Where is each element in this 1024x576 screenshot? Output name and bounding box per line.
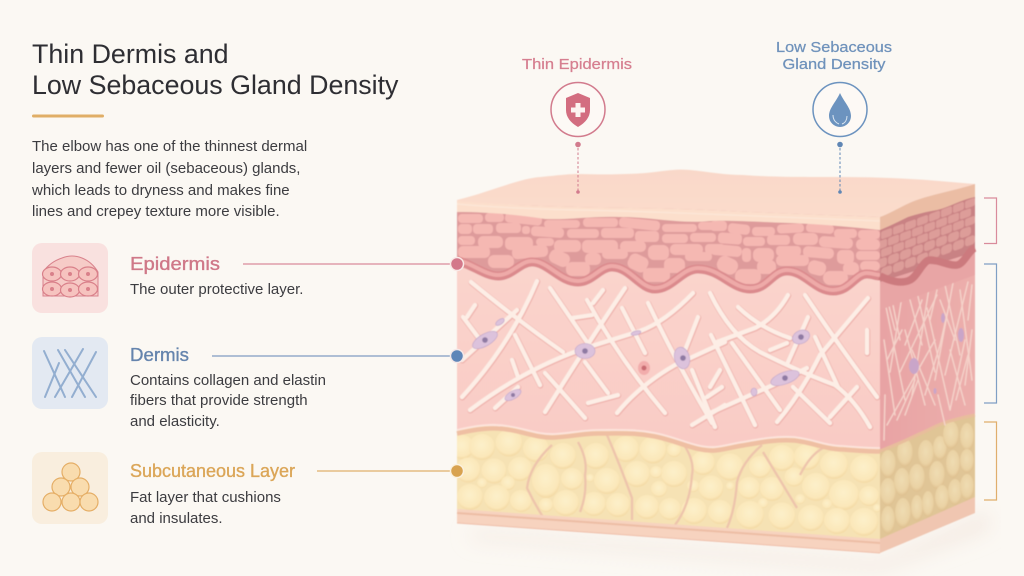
- right side: dermis boundary: [880, 415, 975, 451]
- right side: fat: [880, 400, 975, 541]
- cream stratum band: [457, 201, 880, 230]
- title: Low Sebaceous Gland Density: [32, 70, 399, 100]
- panel: epidermis legend: [32, 243, 303, 313]
- icon: dermis fibers: [32, 337, 108, 409]
- leader line: epidermis: [243, 258, 464, 270]
- intro text: which leads to dryness and makes fine: [31, 182, 290, 199]
- right side: fibers: [884, 282, 972, 440]
- bracket: dermis: [984, 264, 996, 403]
- callout: low sebaceous gland density label: Gland Density: [782, 56, 886, 73]
- block shadow: [470, 510, 990, 572]
- icon: epidermis cells: [32, 243, 108, 313]
- right side: top tan band: [880, 184, 975, 230]
- right side: epidermis cells: [879, 196, 976, 282]
- callout: low sebaceous gland density label: [776, 39, 892, 73]
- leader line: subcutaneous: [317, 464, 464, 478]
- description: dermis: fibers that provide strength: [130, 392, 308, 409]
- epidermis cell layer, front: [457, 205, 880, 291]
- intro text: The elbow has one of the thinnest dermal: [32, 138, 307, 155]
- right side: dermis: [880, 240, 975, 450]
- title: [32, 39, 399, 100]
- dermis, front face: [457, 250, 880, 449]
- description: dermis: [130, 372, 326, 430]
- panel: subcutaneous legend: [32, 452, 295, 527]
- intro text: layers and fewer oil (sebaceous) glands,: [32, 160, 300, 177]
- title: Thin Dermis and: [32, 39, 229, 69]
- description: epidermis: The outer protective layer.: [130, 281, 303, 298]
- heading: dermis: Dermis: [130, 345, 189, 365]
- arrow: sebaceous density pointer: [837, 142, 843, 194]
- connective strands: [527, 435, 823, 528]
- intro text: lines and crepey texture more visible.: [32, 203, 280, 220]
- right side: basement membrane wave: [880, 248, 975, 282]
- collagen and elastin fibers: [462, 281, 877, 428]
- fibroblast cells: [470, 317, 812, 403]
- leader line: dermis: [212, 350, 464, 362]
- bracket: epidermis: [984, 198, 996, 244]
- subcutaneous fat, front face: [450, 425, 881, 542]
- heading: epidermis: Epidermis: [130, 254, 220, 274]
- panel: dermis legend: [32, 337, 326, 430]
- right side: fibroblasts: [909, 313, 964, 394]
- description: dermis: and elasticity.: [130, 413, 220, 430]
- icon: fat cells: [32, 452, 108, 524]
- basement membrane wave, front: [457, 261, 880, 291]
- right side: bottom tissue: [880, 497, 975, 553]
- heading: subcutaneous layer: Subcutaneous Layer: [130, 461, 295, 481]
- top surface: [457, 170, 975, 217]
- arrow: thin epidermis pointer: [575, 142, 581, 194]
- fat layer bottom tissue, front: [457, 509, 880, 553]
- intro text: [31, 138, 307, 220]
- icon: shield callout: [551, 82, 605, 136]
- description: dermis: Contains collagen and elastin: [130, 372, 326, 389]
- description: subcutaneous layer: Fat layer that cushions: [130, 489, 281, 506]
- description: subcutaneous layer: [130, 489, 281, 527]
- description: subcutaneous layer: and insulates.: [130, 510, 223, 527]
- icon: water drop callout: [813, 82, 867, 136]
- right side: dermis cover beneath wave: [880, 251, 975, 310]
- bracket: subcutaneous: [984, 422, 996, 500]
- title accent rule: [32, 114, 104, 118]
- callout: low sebaceous gland density label: Low Sebaceous: [776, 39, 892, 56]
- callout: thin epidermis label: Thin Epidermis: [522, 56, 632, 73]
- skin cross-section block: [450, 170, 990, 572]
- dermis to fat boundary: [457, 425, 880, 452]
